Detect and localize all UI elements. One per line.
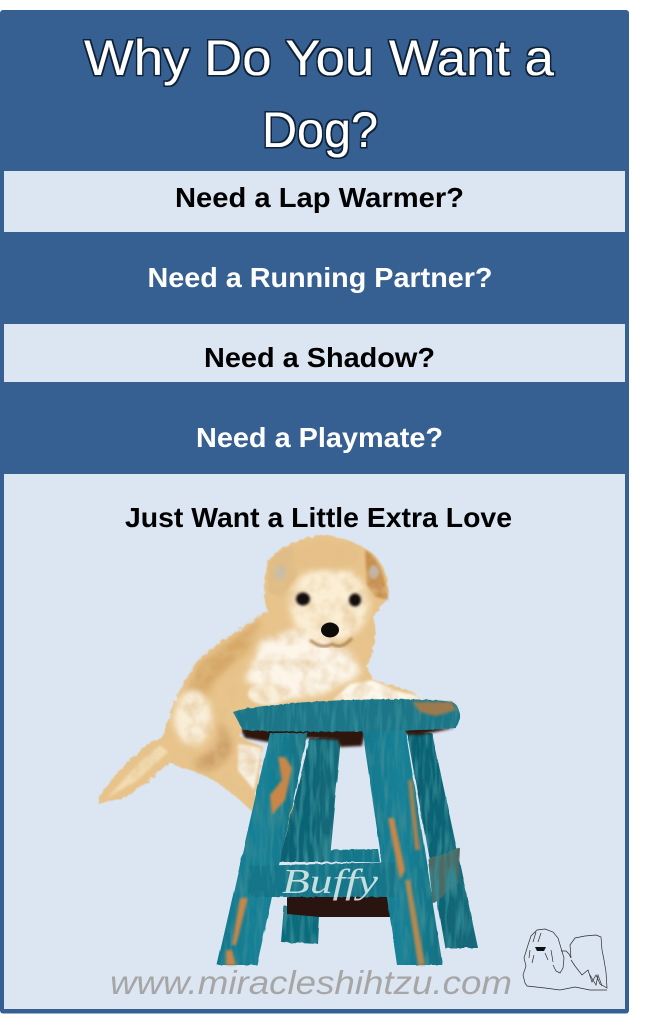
stool underside [240,728,455,747]
right ear inner [369,565,379,579]
mouth [310,638,352,646]
stool weathering [226,702,456,965]
puppy back shading [182,618,262,720]
left ear inner [274,565,286,581]
tail light [108,745,168,797]
right ear [365,550,388,600]
puppy crown [289,542,361,570]
stool front legs and seat [217,699,460,965]
puppy chest highlight [245,628,362,700]
nose [321,622,339,638]
icon: shih tzu line drawing [523,929,607,990]
puppy body [97,535,420,812]
stool name: Buffy: Buffy [282,862,379,901]
band: Need a Shadow [4,324,625,382]
band: Need a Lap Warmer: Need a Lap Warmer? [175,182,464,213]
haunch shadow [194,722,232,772]
band: Need a Running Partner: Need a Running Partner? [148,262,492,293]
shih tzu face [535,947,546,951]
panel: Just Want a Little Extra Love: Just Want a Little Extra Love [125,502,512,533]
stool lower shadow bar [287,895,391,917]
left eye [296,592,310,606]
website url: www.miracleshihtzu.com [110,964,512,1001]
band: Need a Playmate: Need a Playmate? [196,422,443,453]
right eye [349,594,361,606]
band: Need a Lap Warmer [4,171,625,232]
haunch [174,690,212,746]
paw [248,683,288,705]
title: Dog? [262,102,378,158]
paw on seat [333,680,422,702]
belly [238,744,262,790]
band: Need a Shadow: Need a Shadow? [204,342,435,373]
title: Why Do You Want a [84,30,554,86]
title [84,30,554,158]
puppy rear leg behind stool [286,800,300,845]
puppy face [289,566,369,642]
illustration: puppy on stool [97,535,478,965]
left ear [268,547,297,597]
puppy fur group [97,535,422,812]
stool back legs and bars [279,733,478,948]
